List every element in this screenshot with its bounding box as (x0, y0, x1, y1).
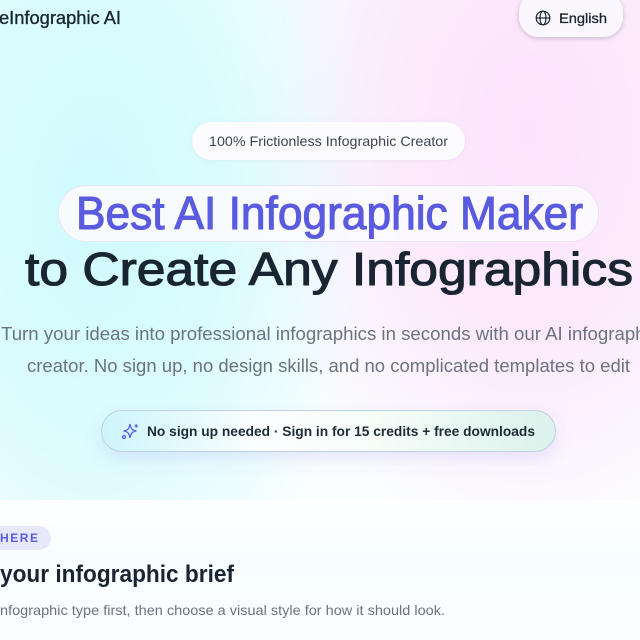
logo wordmark: eInfographic AI (0, 8, 121, 28)
section description: nfographic type first, then choose a visual style for how it should look. (0, 602, 445, 618)
section tag (0, 526, 51, 550)
icon: globe (536, 11, 550, 25)
section heading: your infographic brief (0, 561, 235, 588)
language label: English (559, 10, 607, 26)
notice text: No sign up needed · Sign in for 15 credits + free downloads (147, 423, 535, 439)
subtitle: creator. No sign up, no design skills, and no complicated templates to edit (27, 356, 630, 376)
section tag: HERE (0, 531, 38, 545)
lower section background (0, 500, 640, 640)
badge (192, 122, 465, 160)
title second line: to Create Any Infographics (25, 243, 633, 295)
badge text: 100% Frictionless Infographic Creator (209, 133, 448, 149)
subtitle (1, 324, 640, 376)
icon: sparkles (122, 424, 138, 438)
hero background (0, 0, 640, 500)
language button (519, 0, 623, 37)
title highlight pill: Best AI Infographic Maker (76, 187, 583, 239)
title (25, 186, 633, 295)
call to action notice (102, 410, 556, 452)
subtitle: Turn your ideas into professional infographics in seconds with our AI infographic (1, 324, 640, 344)
